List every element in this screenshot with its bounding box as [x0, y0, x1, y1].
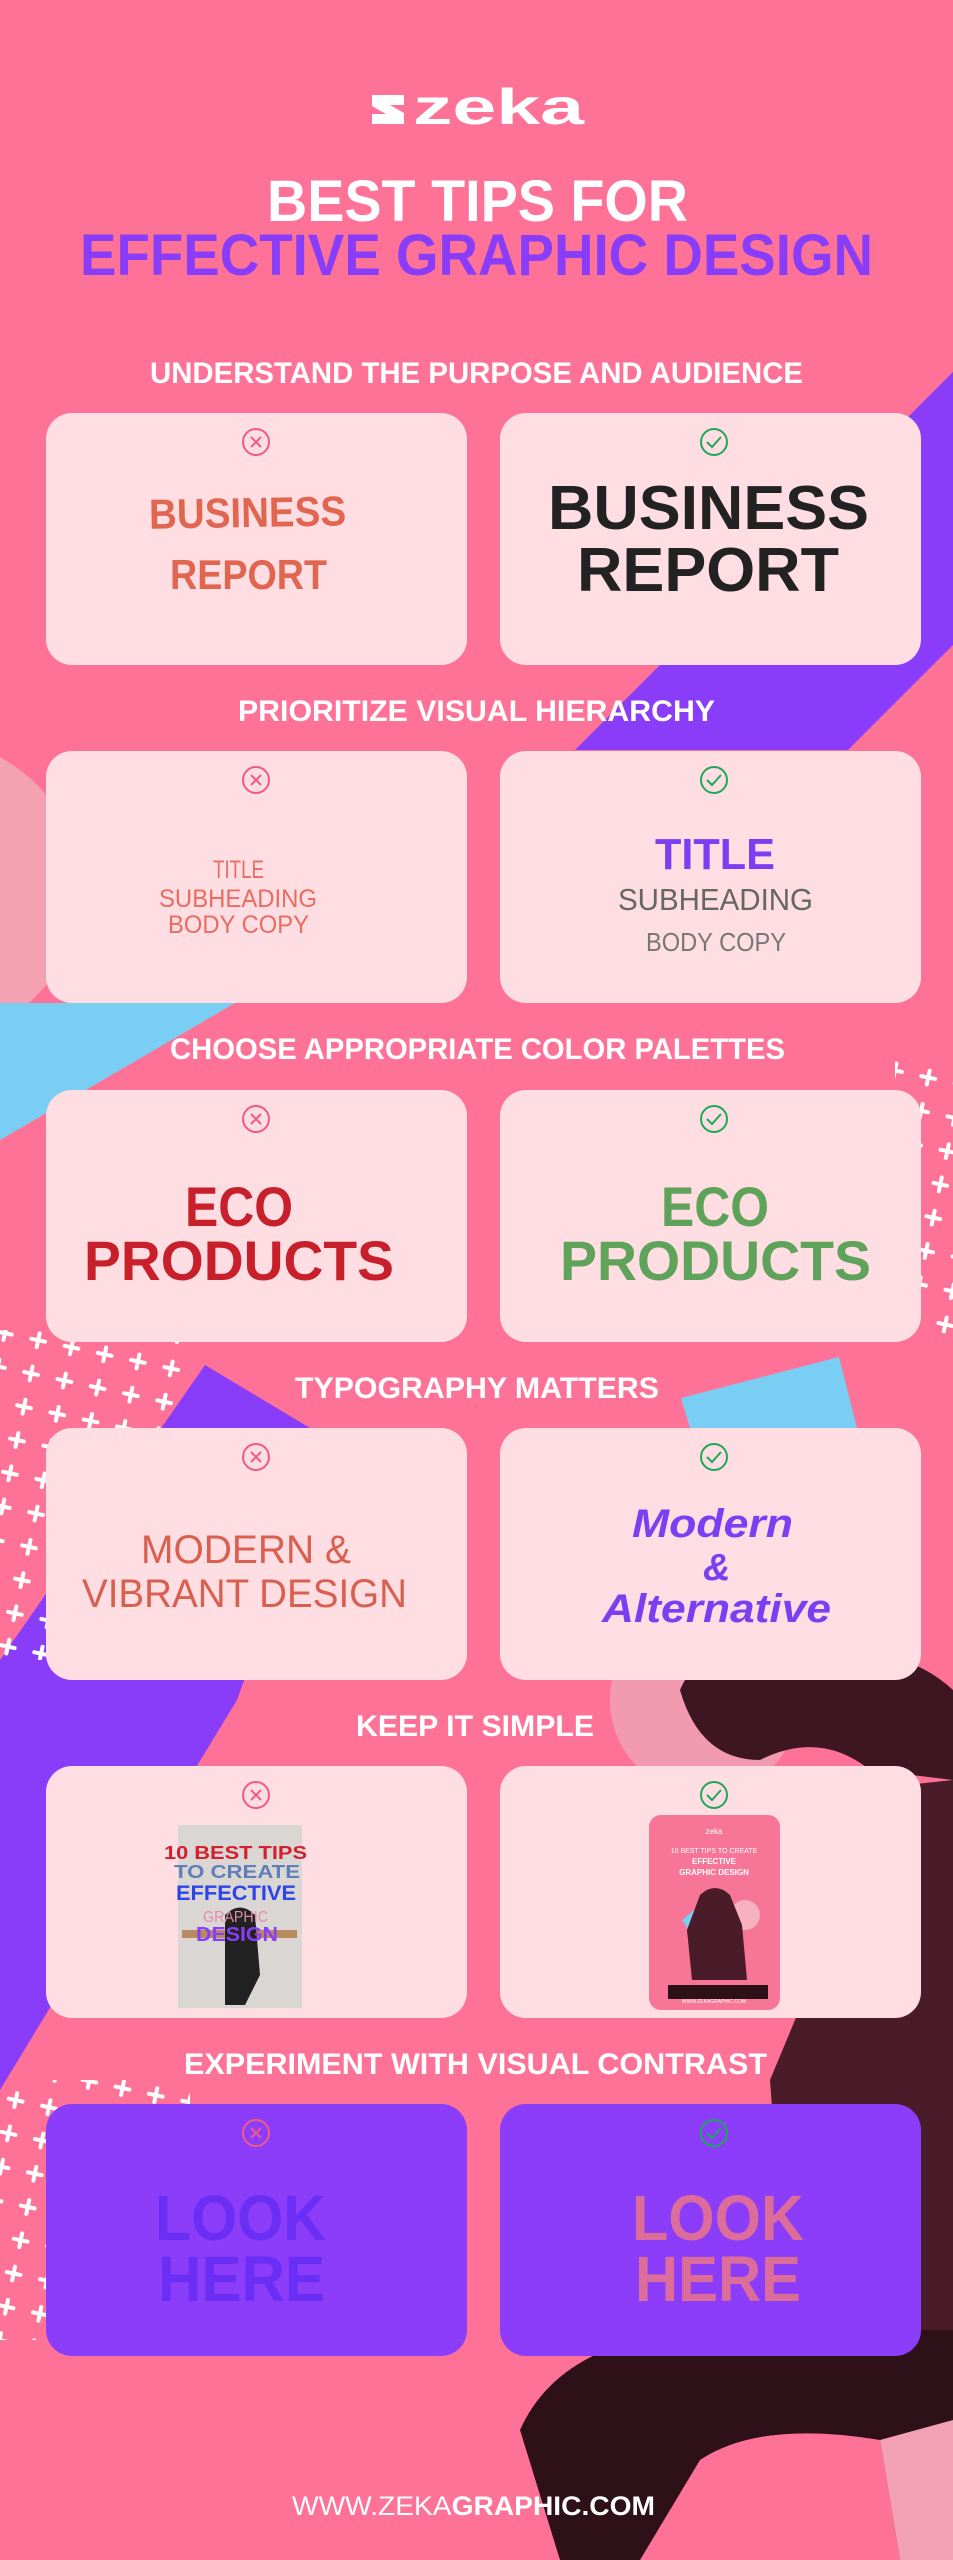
panel: hierarchy wrong	[46, 751, 467, 1003]
panel: typography wrong	[46, 1428, 467, 1680]
text: handwritten: BUSINESS	[149, 487, 346, 538]
text: green eco: ECO	[661, 1175, 769, 1238]
heading 2: PRIORITIZE VISUAL HIERARCHY	[238, 695, 715, 728]
text: low contrast: LOOK	[155, 2182, 326, 2254]
heading 1: UNDERSTAND THE PURPOSE AND AUDIENCE	[150, 357, 803, 390]
icon: cross	[243, 429, 269, 455]
image: clean cover	[649, 1815, 780, 2010]
image: cluttered cover: DESIGN	[196, 1924, 278, 1946]
text: bold: BUSINESS	[548, 474, 869, 543]
image: clean cover: WWW.ZEKAGRAPHIC.COM	[682, 1999, 746, 2005]
text: red eco: PRODUCTS	[84, 1229, 394, 1292]
text: display italic: Modern	[632, 1502, 793, 1546]
text: green eco: PRODUCTS	[560, 1229, 871, 1292]
icon: check	[701, 1106, 727, 1132]
text: handwritten	[149, 487, 346, 598]
text: display italic: &	[703, 1547, 730, 1589]
text: bold	[548, 474, 869, 605]
text: strong hierarchy: TITLE	[655, 830, 775, 879]
decoration: light pink circle	[0, 740, 80, 1040]
text: handwritten: REPORT	[170, 551, 327, 598]
text: green eco	[560, 1175, 871, 1292]
icon: cross	[243, 2120, 269, 2146]
decoration: crosses left	[0, 1330, 185, 1660]
decoration: crosses right	[895, 1060, 953, 1340]
image: cluttered cover: GRAPHIC	[203, 1909, 268, 1926]
footer url: WWW.ZEKAGRAPHIC.COM	[292, 2491, 655, 2521]
text: display italic	[601, 1502, 831, 1631]
image: cluttered cover: 10 BEST TIPS	[164, 1843, 307, 1863]
icon: cross	[243, 1444, 269, 1470]
title	[80, 169, 873, 288]
decoration: purple diagonal band	[575, 372, 953, 750]
icon: check	[701, 1782, 727, 1808]
decoration: crosses bottom left	[0, 2080, 190, 2340]
text: flat hierarchy	[159, 856, 317, 939]
panel: contrast right	[500, 2104, 921, 2356]
text: high contrast	[632, 2182, 804, 2315]
text: display italic: Alternative	[601, 1587, 831, 1631]
panel: contrast wrong	[46, 2104, 467, 2356]
text: strong hierarchy: SUBHEADING	[618, 882, 813, 917]
panel: business report right	[500, 413, 921, 665]
heading 6: EXPERIMENT WITH VISUAL CONTRAST	[184, 2048, 767, 2081]
image: cluttered cover	[164, 1825, 307, 2008]
panel: simple right	[500, 1766, 921, 2018]
icon: cross	[243, 1782, 269, 1808]
text: low contrast	[155, 2182, 326, 2315]
icon: cross	[243, 1106, 269, 1132]
image: clean cover: zeka	[706, 1827, 723, 1836]
panel: typography right	[500, 1428, 921, 1680]
text: flat hierarchy: SUBHEADING	[159, 885, 317, 913]
icon: check	[701, 767, 727, 793]
icon: cross	[243, 767, 269, 793]
photo: woman	[520, 1605, 953, 2560]
text: serif	[82, 1528, 407, 1616]
logo: zeka	[413, 79, 586, 135]
decoration: light blue band	[0, 1003, 235, 1140]
decoration: light blue quad	[681, 1357, 857, 1428]
panel: hierarchy right	[500, 751, 921, 1003]
panel: color wrong	[46, 1090, 467, 1342]
text: high contrast: LOOK	[632, 2182, 804, 2254]
heading 3: CHOOSE APPROPRIATE COLOR PALETTES	[170, 1033, 785, 1066]
icon: check	[701, 1444, 727, 1470]
heading 4: TYPOGRAPHY MATTERS	[295, 1372, 659, 1405]
image: clean cover: EFFECTIVE	[692, 1857, 737, 1866]
text: red eco: ECO	[185, 1175, 293, 1238]
text: red eco	[84, 1175, 394, 1292]
panel: simple wrong	[46, 1766, 467, 2018]
image: clean cover: GRAPHIC DESIGN	[679, 1868, 749, 1877]
image: clean cover: 10 BEST TIPS TO CREATE	[671, 1848, 758, 1855]
panel: color right	[500, 1090, 921, 1342]
title: BEST TIPS FOR	[267, 169, 688, 234]
decoration: purple lower left shape	[0, 1365, 330, 2090]
text: high contrast: HERE	[635, 2243, 801, 2315]
panel: business report wrong	[46, 413, 467, 665]
text: strong hierarchy	[618, 830, 813, 957]
heading 5: KEEP IT SIMPLE	[356, 1710, 594, 1743]
text: strong hierarchy: BODY COPY	[646, 927, 786, 957]
image: cluttered cover: TO CREATE	[174, 1862, 300, 1882]
icon: check	[701, 2120, 727, 2146]
text: low contrast: HERE	[158, 2243, 325, 2315]
logo	[372, 79, 586, 135]
text: flat hierarchy: BODY COPY	[168, 911, 309, 939]
icon: check	[701, 429, 727, 455]
text: serif: VIBRANT DESIGN	[82, 1572, 407, 1616]
text: flat hierarchy: TITLE	[213, 856, 264, 884]
text: bold: REPORT	[577, 536, 839, 605]
image: cluttered cover: EFFECTIVE	[176, 1882, 296, 1905]
text: serif: MODERN &	[141, 1528, 351, 1572]
title: EFFECTIVE GRAPHIC DESIGN	[80, 223, 873, 288]
